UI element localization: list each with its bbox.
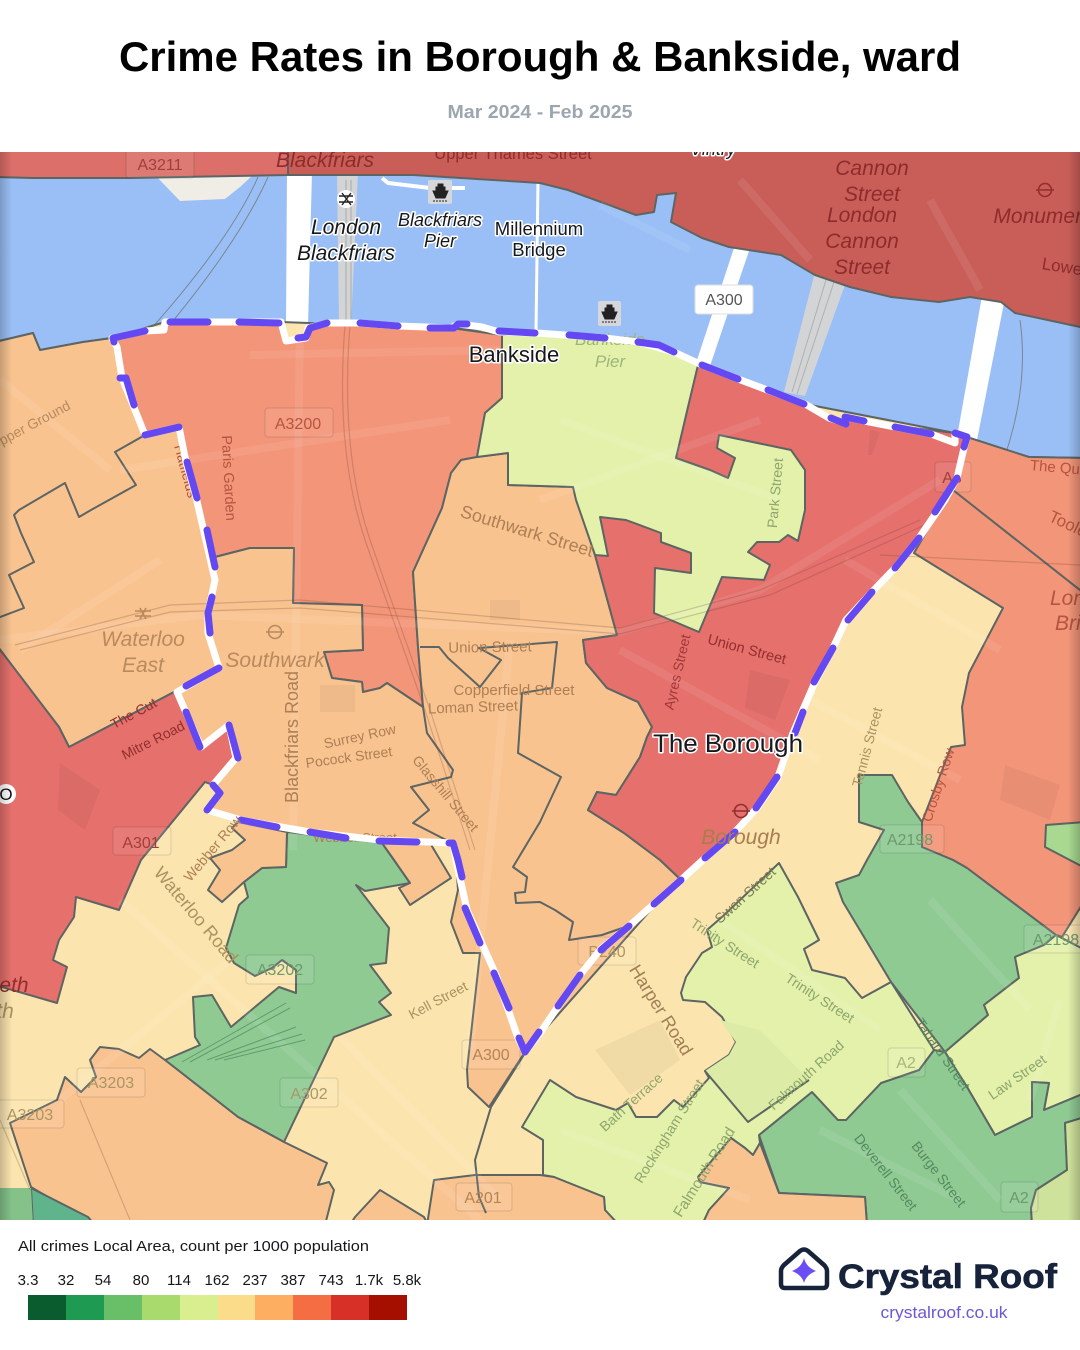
label: Bankside Pier: Pier — [595, 352, 626, 371]
road label: A2 east: A2 — [1009, 1190, 1029, 1207]
ward: Tabard green — [836, 775, 1056, 1052]
place labels north bank: Cannon — [825, 230, 899, 253]
legend tick labels: 237 — [242, 1272, 268, 1289]
legend tick labels: 114 — [167, 1272, 191, 1289]
ward: teal bottom-left — [30, 1188, 92, 1220]
ward: Blackfriars salmon — [112, 322, 502, 707]
street labels salmon wards: Crosby Row — [919, 745, 958, 824]
street labels light green wards: Park Street — [764, 457, 786, 529]
place labels north bank: Cannon — [835, 157, 909, 180]
street labels orange wards: Pocock Street — [305, 743, 393, 771]
station label: London Blackfriars: Blackfriars — [297, 242, 396, 265]
pier label: Blackfriars Pier: Pier — [424, 231, 457, 251]
road label: A301 — [113, 827, 171, 855]
street labels green wards: Burge Street — [908, 1138, 970, 1210]
street labels light green wards: Bath Terrace — [596, 1069, 666, 1134]
street labels red wards: Ayres Street — [661, 633, 693, 711]
road label: A2 east — [1001, 1182, 1038, 1212]
street labels yellow wards: Waterloo Road — [150, 863, 242, 967]
street labels green wards: Tabard Street — [912, 1015, 974, 1093]
ward: small orange south — [352, 1189, 426, 1220]
road label: A3211 — [126, 150, 194, 178]
street labels light green wards: Rockingham Street — [631, 1076, 707, 1186]
road label: A3202 — [246, 955, 314, 984]
place labels north bank — [276, 139, 1080, 280]
ward: east green patch — [1045, 822, 1080, 868]
street labels yellow wards: Kell Street — [406, 978, 470, 1022]
south bank base: yellow wards — [0, 322, 1080, 1225]
legend tick labels: 80 — [133, 1272, 149, 1289]
street labels orange wards — [0, 397, 596, 884]
station label: London Blackfriars — [297, 216, 396, 265]
road label: A301: A301 — [122, 835, 160, 852]
ward: Trinity light green — [522, 863, 934, 1225]
road label: A300 south: A300 — [472, 1047, 510, 1064]
street labels yellow wards — [150, 705, 885, 1059]
street labels red wards: Borough — [701, 826, 781, 849]
bridges — [150, 172, 1022, 470]
legend tick labels — [18, 1272, 422, 1289]
legend tick labels: 387 — [280, 1272, 306, 1289]
street labels yellow wards: Harper Road — [625, 961, 697, 1059]
street labels green wards — [851, 1015, 974, 1213]
road label: A3200: A3200 — [275, 416, 321, 433]
street labels salmon wards: Paris Garden — [218, 435, 238, 521]
road label: A201: A201 — [464, 1190, 502, 1207]
ward: east salmon London Bridge — [914, 437, 1080, 937]
road label: A201 — [456, 1183, 512, 1211]
road label: A3 at London Bridge — [935, 462, 971, 492]
street labels salmon wards — [218, 435, 1080, 824]
legend tick labels: 162 — [204, 1272, 230, 1289]
icon: house with sparkle — [781, 1250, 827, 1288]
building footprints — [58, 430, 1060, 1095]
street labels orange wards: Copperfield Street — [454, 682, 575, 699]
label: Millennium Bridge: Bridge — [512, 239, 566, 260]
ward: central orange — [177, 453, 679, 1107]
street labels light green wards: Falmouth Road — [765, 1037, 847, 1113]
street labels red wards: Union Street — [706, 632, 788, 668]
ward: bottom-left orange — [10, 1047, 334, 1225]
labels hidden under the boundary: Hatfields — [171, 443, 201, 499]
street labels red wards: eth — [0, 974, 29, 997]
icon: tube Borough — [732, 804, 750, 818]
road label: A3202: A3202 — [257, 962, 303, 979]
road label: A302 — [280, 1078, 338, 1107]
ward: A201 orange — [427, 1175, 619, 1225]
road label: A2 centre — [888, 1048, 925, 1077]
pier label: Blackfriars Pier — [398, 210, 482, 251]
street labels light green wards: Law Street — [985, 1051, 1049, 1103]
icon: rail station Blackfriars — [337, 190, 355, 208]
road label: A3 at London Bridge: A3 — [942, 470, 962, 487]
road label: A3203 west: A3203 — [7, 1107, 53, 1124]
street labels green wards: Deverell Street — [851, 1131, 921, 1213]
label: Millennium Bridge: Millennium — [495, 218, 583, 239]
road label: A300 south — [462, 1040, 520, 1069]
legend — [18, 1238, 422, 1320]
place labels north bank: Upper Thames Street — [434, 145, 592, 163]
logo url: crystalroof.co.uk — [880, 1304, 1008, 1322]
legend colour scale — [28, 1295, 407, 1320]
ward: A3202 green — [165, 832, 410, 1142]
street labels red wards — [0, 632, 788, 1023]
legend tick labels: 1.7k — [355, 1272, 384, 1289]
labels hidden under the boundary: Webber Street — [313, 830, 397, 845]
road label: B240: B240 — [588, 944, 626, 961]
river thames — [0, 176, 1080, 457]
road texture — [0, 180, 1060, 1220]
icon: ferry Blackfriars Pier — [428, 180, 452, 204]
place labels north bank: Street — [834, 256, 891, 279]
labels hidden under the boundary — [171, 330, 645, 845]
legend tick labels: 32 — [58, 1272, 74, 1289]
ward boundary: purple dashes — [113, 322, 967, 1052]
road label: A300 river: A300 — [705, 292, 743, 309]
rail depot tracks in green ward — [182, 1003, 305, 1062]
logo: Crystal Roof — [781, 1250, 1058, 1322]
title: Crime Rates in Borough & Bankside, ward — [119, 33, 961, 80]
road label: A3203 east — [77, 1068, 145, 1097]
icon: rail station Waterloo East — [135, 608, 151, 619]
place labels north bank: Street — [844, 183, 901, 206]
ward: small orange Webber Row — [208, 822, 287, 902]
labels hidden under the boundary: Bankside — [575, 330, 645, 349]
logo wordmark: Crystal Roof — [838, 1258, 1058, 1296]
place labels north bank: London — [827, 204, 897, 227]
street labels yellow wards: Tennis Street — [849, 705, 885, 789]
road label: A2198 east — [1024, 925, 1080, 953]
ward: The Borough red — [583, 365, 967, 878]
street labels orange wards: Blackfriars Road — [282, 671, 302, 803]
legend tick labels: 743 — [318, 1272, 344, 1289]
road label: A302: A302 — [290, 1086, 328, 1103]
street labels orange wards: East — [122, 654, 165, 677]
inner ward outlines — [0, 435, 1080, 1213]
road label: A2198 centre: A2198 — [887, 832, 933, 849]
road label: A300 river — [695, 285, 753, 314]
street labels orange wards: Southwark Street — [458, 501, 596, 561]
ward: Waterloo East orange — [0, 333, 219, 747]
street labels orange wards: Glasshill Street — [409, 752, 482, 835]
ward: Harper Road shaded block — [705, 1020, 737, 1072]
ward: west red Mitre Road — [0, 643, 236, 1003]
pier label: Blackfriars Pier: Blackfriars — [398, 210, 482, 230]
ward boundary: white line — [112, 322, 967, 1052]
street labels red wards: The Cut — [108, 694, 159, 732]
ward: small orange Kell — [382, 843, 451, 905]
icon: tube Monument — [1036, 184, 1054, 196]
label: Millennium Bridge — [495, 218, 583, 260]
legend tick labels: 5.8k — [393, 1272, 422, 1289]
street labels orange wards: Southwark — [225, 649, 326, 672]
ward: corner green — [0, 1188, 33, 1220]
ward: orange south-east — [698, 1138, 867, 1225]
road label: A3203 east: A3203 — [88, 1075, 134, 1092]
legend title: All crimes Local Area, count per 1000 population — [18, 1238, 369, 1255]
north bank: dark red city ward — [288, 148, 1080, 328]
road label: A3200 — [265, 408, 333, 437]
railway lines — [0, 325, 1080, 1220]
place labels north bank: Vintry — [690, 139, 737, 159]
street labels light green wards — [596, 457, 1049, 1220]
street labels orange wards: Surrey Row — [322, 720, 398, 751]
road label: A2198 centre — [880, 825, 944, 853]
subtitle: date range: Mar 2024 - Feb 2025 — [448, 101, 632, 122]
street labels light green wards: Trinity Street — [783, 970, 858, 1026]
road label: A2 centre: A2 — [896, 1055, 916, 1072]
road label: A2198 east: A2198 — [1033, 932, 1079, 949]
place label: The Borough: The Borough — [653, 730, 803, 758]
street labels orange wards: Waterloo — [101, 628, 185, 651]
icon: tube Southwark — [266, 626, 284, 638]
ward: Law Street light green — [945, 935, 1080, 1135]
ward: Deverell green — [759, 1050, 1080, 1225]
road label: A3203 west — [0, 1100, 64, 1128]
street labels orange wards: Loman Street — [428, 697, 519, 718]
street labels light green wards: Falmouth Road — [670, 1124, 739, 1220]
street labels light green wards: Trinity Street — [688, 915, 763, 971]
road label: A3211: A3211 — [137, 157, 183, 174]
ward: Bankside light green — [477, 333, 805, 632]
place labels north bank: Blackfriars — [276, 149, 375, 172]
street labels orange wards: Union Street — [448, 638, 533, 657]
icon: ferry Bankside Pier — [598, 301, 621, 326]
place label: Bankside: Bankside — [469, 342, 559, 367]
street labels orange wards: Webber Row — [180, 812, 245, 884]
map edge shading — [0, 152, 1080, 1220]
legend tick labels: 54 — [95, 1272, 111, 1289]
north bank: lighter red ward — [0, 148, 288, 178]
street labels yellow wards: Swan Street — [711, 863, 779, 926]
legend tick labels: 3.3 — [18, 1272, 38, 1289]
street labels red wards: Mitre Road — [119, 717, 187, 763]
road label: B240 — [578, 937, 636, 965]
ward: south-east corner — [1031, 1117, 1080, 1225]
station label: London Blackfriars: London — [311, 216, 381, 239]
